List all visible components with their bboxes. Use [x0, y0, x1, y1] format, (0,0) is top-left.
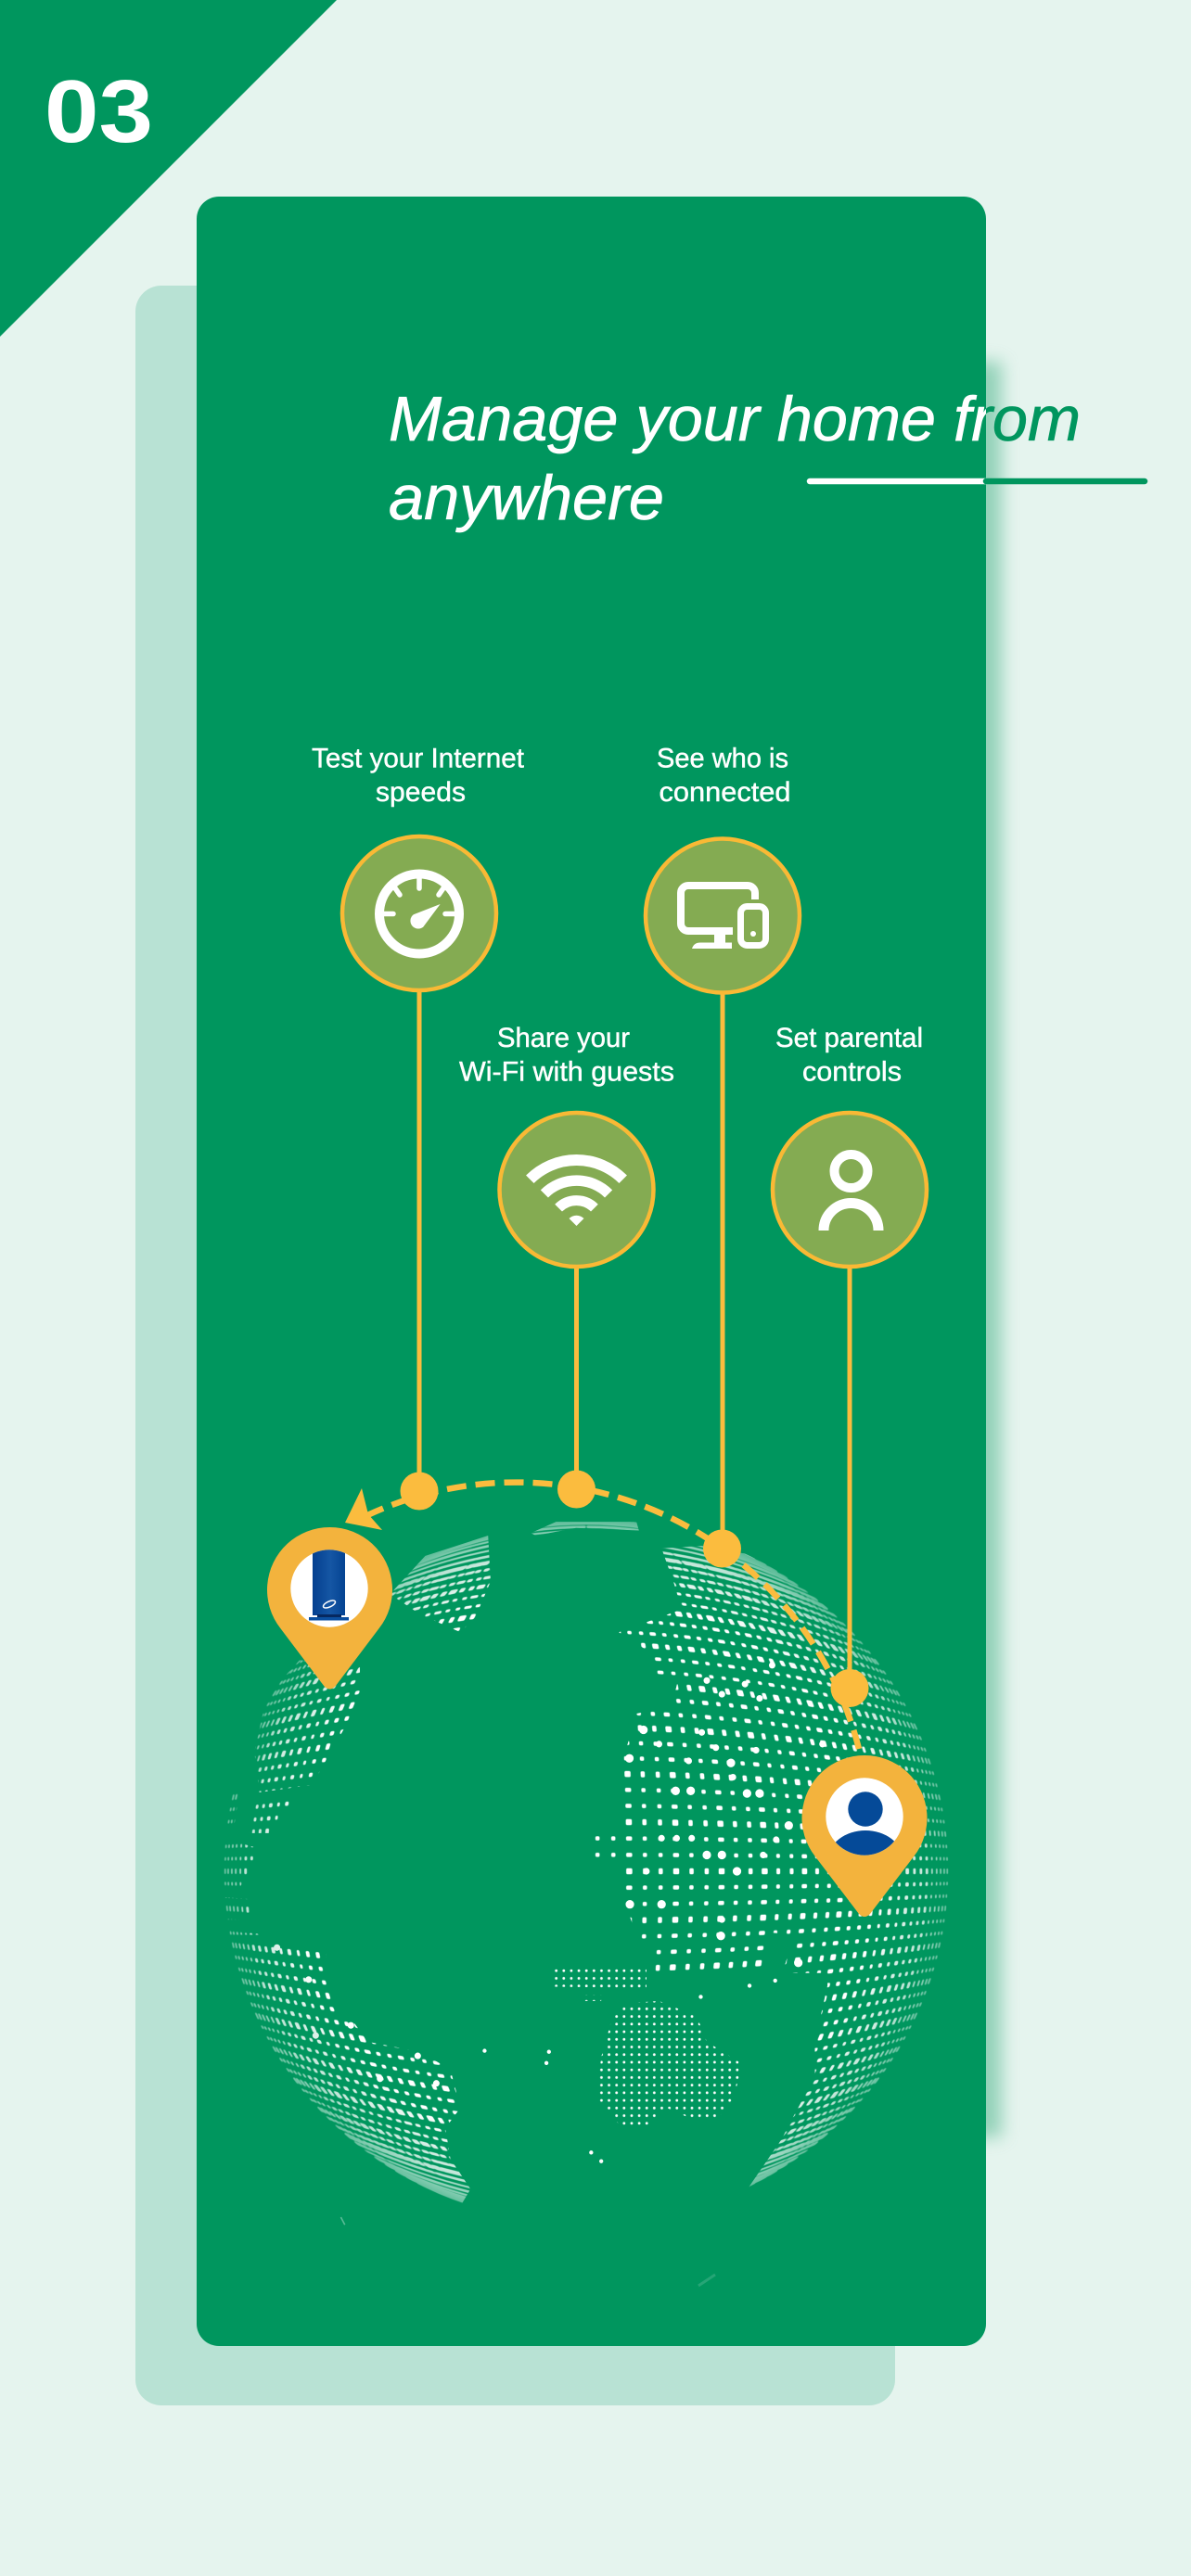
back panel	[135, 286, 895, 2405]
title	[389, 384, 1081, 533]
main green card	[197, 197, 986, 2346]
label: parental controls: controls	[802, 1057, 902, 1087]
corner triangle	[0, 0, 337, 337]
icon: devices	[646, 838, 800, 992]
pin: router	[267, 1527, 392, 1690]
connector: connected devices	[703, 994, 741, 1567]
icon: person	[773, 1113, 927, 1267]
title underline	[810, 478, 1145, 484]
label: test speeds: speeds	[376, 777, 466, 808]
connector: parental controls	[831, 1269, 868, 1707]
dashed route arc	[364, 1483, 859, 1749]
label: share wi-fi: Share your	[497, 1023, 630, 1053]
connector: test speeds	[401, 992, 438, 1510]
icon: speedometer	[342, 836, 496, 990]
section number: 03	[45, 62, 153, 161]
card shadow	[853, 362, 1002, 2137]
dotted globe	[221, 1519, 952, 2286]
title: Manage your home from	[389, 384, 1081, 454]
label: test speeds: Test your Internet	[312, 744, 525, 773]
label: see who is connected: See who is	[657, 744, 788, 773]
label: test speeds	[312, 744, 525, 808]
title: anywhere	[389, 463, 664, 533]
label: parental controls	[775, 1023, 923, 1087]
icon: wi-fi	[499, 1113, 653, 1267]
arrowhead	[345, 1488, 382, 1530]
label: see who is connected	[657, 744, 790, 808]
label: share wi-fi: Wi-Fi with guests	[459, 1057, 674, 1087]
label: see who is connected: connected	[659, 777, 790, 808]
pin: user	[801, 1755, 928, 1917]
connector: wi-fi	[557, 1269, 596, 1508]
label: parental controls: Set parental	[775, 1023, 923, 1053]
label: share wi-fi	[459, 1023, 674, 1087]
